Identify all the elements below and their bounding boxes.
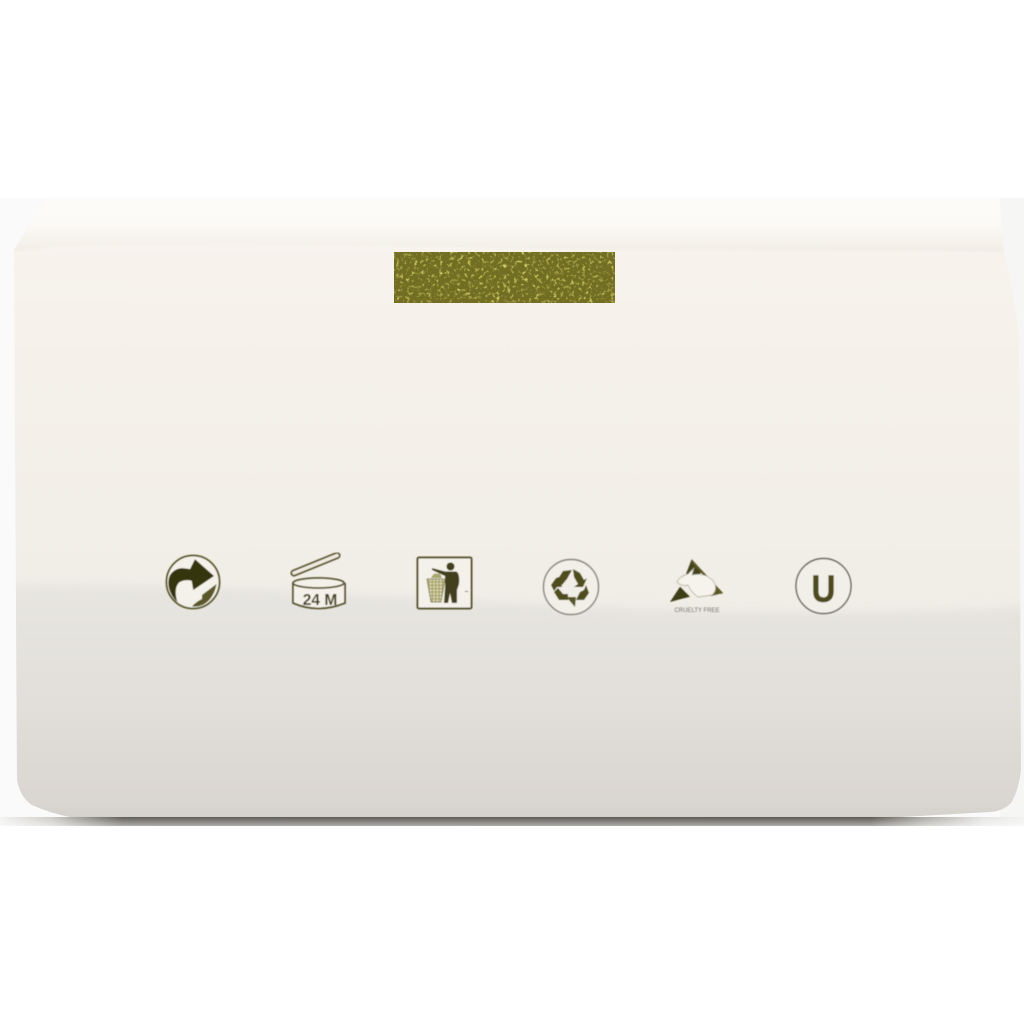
bar body [14, 232, 1021, 817]
label: U: U [812, 568, 836, 610]
symbols row [166, 556, 851, 614]
icon: U kosher mark [796, 558, 851, 614]
product bar illustration [0, 198, 1024, 826]
top highlight band [0, 190, 1024, 252]
icon: period after opening 24 months [293, 556, 345, 609]
icon: recycling [544, 560, 598, 614]
gold label bar [394, 252, 615, 303]
lower grey reflection [16, 589, 1021, 817]
backdrop strip behind bar [0, 198, 1024, 826]
label: 24 M: 24 M [303, 592, 337, 609]
icon: tidy man [418, 558, 472, 608]
label: cruelty free: CRUELTY FREE [674, 608, 720, 614]
icon: cruelty free rabbit [670, 559, 723, 614]
icon: green dot [166, 556, 220, 608]
